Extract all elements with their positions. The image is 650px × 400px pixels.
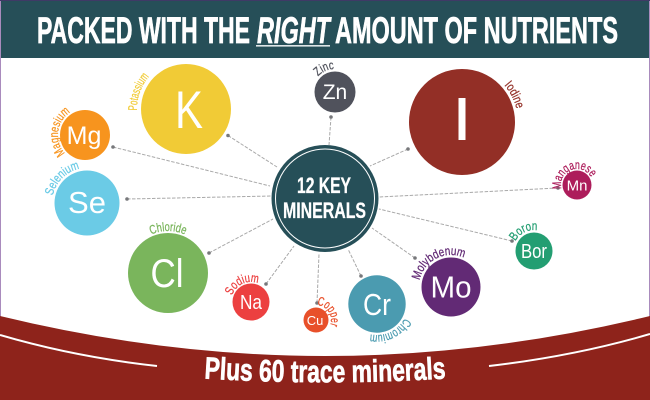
mineral: boron: [508, 223, 552, 270]
mineral: manganese: Manganese: [552, 162, 596, 188]
title banner: PACKED WITH THE: [37, 10, 250, 51]
mineral: potassium: [128, 64, 231, 154]
mineral: chloride: Cl: [150, 252, 184, 296]
mineral: potassium: Potassium: [128, 73, 149, 110]
mineral: copper: Cu: [307, 313, 323, 328]
mineral: zinc: Zn: [323, 81, 347, 104]
mineral: sodium: [225, 274, 270, 320]
mineral: magnesium: [51, 108, 110, 160]
mineral: magnesium: Magnesium: [51, 108, 70, 158]
mineral: zinc: [312, 62, 356, 112]
mineral: copper: Copper: [318, 297, 338, 328]
bottom banner: trace minerals: [0, 316, 650, 400]
mineral: zinc: Zinc: [312, 62, 334, 76]
mineral: selenium: Se: [68, 185, 106, 220]
center hub: 12 key minerals: 12 KEY: [297, 173, 351, 198]
title banner: RIGHT: [257, 10, 332, 51]
mineral: iodine: Iodine: [504, 80, 522, 108]
mineral: selenium: [45, 162, 120, 236]
mineral: chloride: [128, 222, 208, 313]
mineral: magnesium: Mg: [67, 122, 101, 150]
mineral: molybdenum: Molybdenum: [411, 248, 465, 280]
mineral: sodium: Sodium: [225, 274, 258, 294]
mineral: molybdenum: [411, 248, 480, 316]
mineral: boron: Bor: [521, 241, 547, 263]
title banner: [0, 0, 650, 58]
mineral: chloride: Chloride: [150, 222, 186, 234]
dashed connector lines: [111, 115, 560, 305]
mineral: copper: [304, 297, 338, 332]
mineral: manganese: [552, 162, 596, 200]
mineral: iodine: [409, 69, 522, 175]
bottom banner: trace minerals: Plus 60 trace minerals: [205, 356, 445, 383]
mineral: selenium: Selenium: [45, 162, 80, 195]
mineral: chromium: Cr: [363, 287, 391, 322]
mineral: chromium: Chromium: [370, 320, 411, 344]
center hub: 12 key minerals: [272, 145, 378, 252]
center hub: 12 key minerals: MINERALS: [283, 198, 366, 223]
mineral: manganese: Mn: [567, 178, 587, 194]
mineral: potassium: K: [175, 81, 203, 140]
mineral: chromium: [348, 275, 411, 344]
mineral: boron: Boron: [508, 223, 537, 241]
mineral: sodium: Na: [240, 292, 263, 314]
mineral: molybdenum: Mo: [430, 270, 472, 304]
